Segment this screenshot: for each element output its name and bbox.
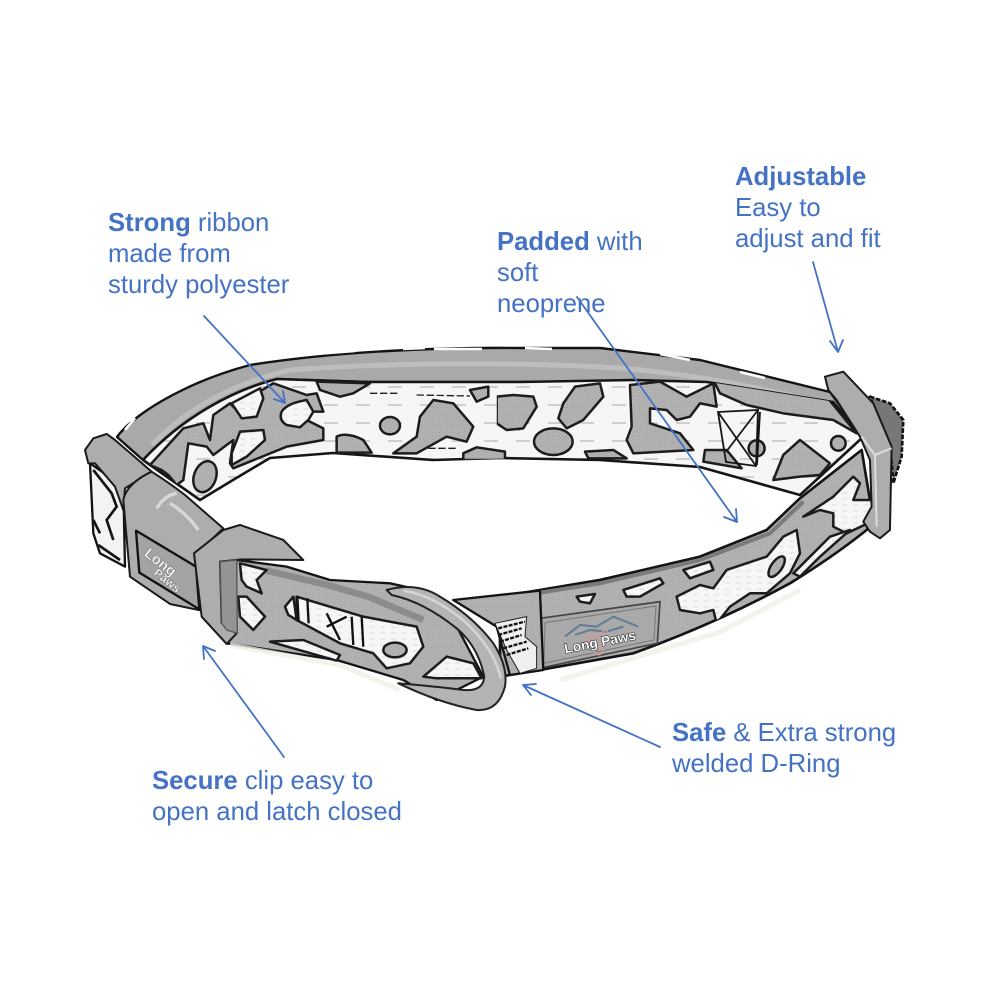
woven ribbon back [143,379,863,500]
buckle clip plate [123,472,223,611]
box stitch back [718,410,760,466]
arrow: safe d-ring [523,684,660,747]
D-ring [387,587,506,710]
bottom strip [270,640,340,661]
arrow: padded [577,297,737,522]
webbing marks [93,470,120,560]
callout: padded: soft [497,259,538,287]
callout: safe d-ring: Safe [672,719,726,747]
box stitch [297,596,363,647]
ribbon base left [227,560,483,700]
stub white fringe [495,617,537,673]
collar front band right [500,450,875,677]
callout: secure clip: clip easy to [238,767,373,795]
arrow: adjustable [813,262,843,352]
callout: safe d-ring: welded D-Ring [671,750,840,778]
ribbon fold shadow [267,571,423,620]
ring shine [403,591,501,678]
buckle embossed tag [136,531,199,609]
buckle socket [194,525,303,644]
tag wordmark 2: Paws [151,566,184,596]
callout: strong ribbon: sturdy polyester [108,271,290,299]
callout: safe d-ring: & Extra strong [726,719,896,747]
socket inner slot [220,560,237,633]
webbing behind right buckle [870,397,903,483]
lower white patch [423,657,482,678]
callout: padded: neoprene [497,290,606,318]
clip highlight [157,493,198,530]
padding highlight [152,364,820,445]
right buckle body [825,372,892,538]
webbing through end loop [90,463,125,567]
logo paw [585,630,608,655]
ribbon pattern right [497,380,857,480]
callout: padded: with [590,228,643,256]
white patch [240,563,267,593]
band base [500,450,873,677]
buckle end body [85,434,152,510]
right buckle end [825,372,903,538]
right buckle facet [862,437,892,527]
grey spot [383,643,407,657]
callout: padded: Padded [497,228,590,256]
callout: adjustable: Easy to [735,194,821,222]
shadow under collar [230,590,800,690]
arrow: secure clip [203,646,284,757]
front pattern [541,475,871,620]
ribbon stub [453,591,543,675]
callout: secure clip: open and latch closed [152,798,402,826]
white patch [238,597,265,630]
ribbon pattern left [150,382,530,495]
logo mountains [565,617,638,637]
band behind D-ring [453,591,543,675]
white stitched patch [297,597,423,668]
woven label [539,602,660,668]
callout: adjustable: adjust and fit [735,225,881,253]
callout: strong ribbon: Strong [108,209,191,237]
outer edge stitches [125,348,765,430]
collar back band [117,348,865,500]
logo wordmark: Long Paws [563,628,637,656]
neoprene padding strip [117,348,865,460]
callout: strong ribbon: made from [108,240,231,268]
left ribbon and stitching [227,560,483,700]
white patch [285,597,297,620]
callout: secure clip: Secure [152,767,238,795]
arrow: strong ribbon [204,316,285,403]
callout: strong ribbon: ribbon [191,209,269,237]
left buckle end [85,434,303,644]
tag wordmark: Long [141,546,179,580]
stub stripes [498,622,528,655]
callout: adjustable: Adjustable [735,163,866,191]
collar illustration [85,348,875,710]
ring body [387,587,506,710]
